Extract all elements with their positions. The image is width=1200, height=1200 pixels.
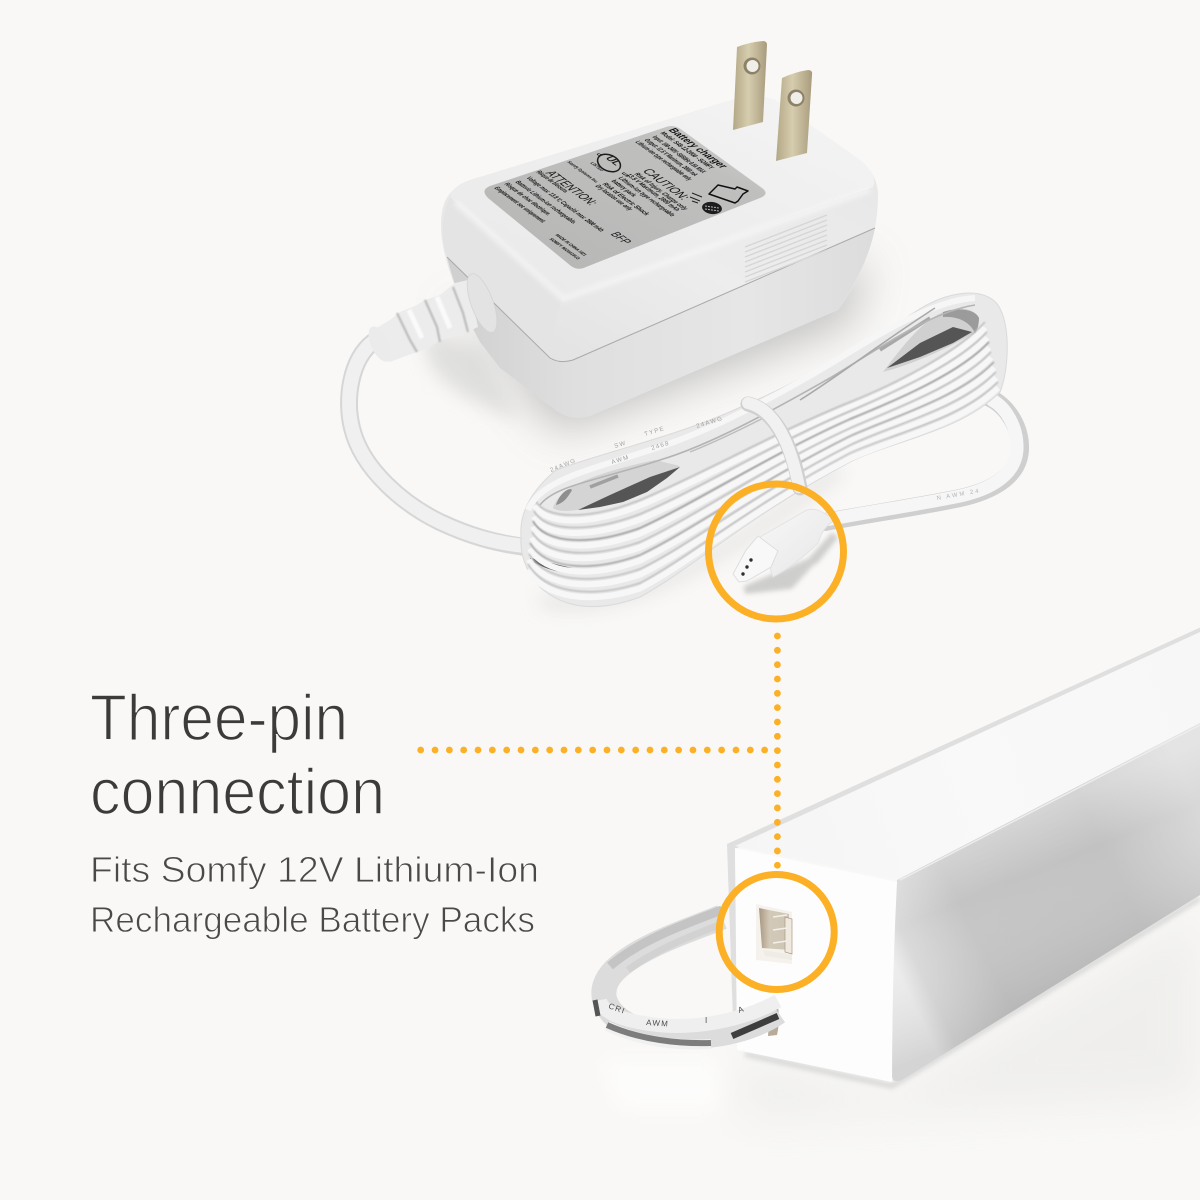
label text: ATTENTION: — [542, 169, 602, 207]
plug prongs — [733, 41, 812, 161]
icon: UL listed mark: UL — [602, 155, 623, 167]
label text: MADE IN CHINA 1821 — [553, 234, 588, 257]
body seam — [447, 228, 875, 362]
label text: BFP — [607, 230, 635, 246]
battery front face — [735, 848, 897, 1082]
wire printing: SW — [614, 441, 628, 450]
ribbed sleeve — [373, 280, 478, 362]
vent slats — [745, 215, 827, 282]
subheading: Rechargeable Battery Packs — [90, 899, 535, 940]
label text: CAUTION: — [639, 167, 694, 201]
wire printing: 2468 — [651, 441, 671, 452]
cable printing: A — [737, 1004, 746, 1015]
label text: Lithium-ion type rechargeable only — [633, 140, 693, 181]
plug pins — [741, 558, 753, 576]
loose flat wire to connector: N AWM 24 — [936, 488, 981, 502]
icon: UL listed mark — [595, 151, 623, 175]
battery pack — [727, 628, 1200, 1082]
body top face — [450, 96, 874, 297]
heading — [90, 681, 385, 828]
highlight ring: battery socket — [719, 874, 834, 990]
body front face — [550, 187, 876, 362]
icon: battery symbol — [701, 201, 723, 215]
cable printing: I — [705, 1016, 708, 1025]
subheading: Fits Somfy 12V Lithium-Ion — [90, 849, 539, 890]
cable printing: AWM — [646, 1018, 669, 1029]
sleeve tip — [364, 323, 396, 365]
plug body — [760, 509, 836, 577]
label text: Emplacement sec uniquement. — [492, 186, 547, 224]
label text: Batterie Lithium-ion rechargeable. — [513, 180, 578, 225]
sleeve rib highlights — [409, 297, 450, 338]
plug shadow — [745, 535, 835, 590]
battery top face — [735, 632, 1200, 880]
charger label — [484, 126, 766, 269]
cable tie — [748, 403, 800, 488]
battery side face — [892, 723, 1200, 1081]
label text: LISTED — [588, 162, 605, 172]
highlight ring: plug — [708, 484, 844, 619]
label text: us — [619, 172, 631, 178]
cable printing — [607, 1001, 746, 1029]
charger floor shadow — [426, 260, 870, 604]
body front highlight — [455, 190, 870, 299]
label plate — [484, 126, 766, 269]
three-pin plug — [733, 509, 836, 582]
label text: Model: S48-12-2000 - SOMFY — [658, 131, 715, 170]
cable printing: CRI — [607, 1001, 627, 1016]
body lower half — [447, 228, 875, 418]
sleeve collar — [461, 270, 503, 336]
coil right opening — [880, 309, 979, 372]
label text: Risque de choc électrique. — [502, 182, 552, 216]
label text — [492, 127, 730, 260]
battery socket — [756, 904, 792, 964]
body silhouette — [441, 96, 878, 418]
prong left — [733, 41, 767, 130]
heading: connection — [90, 755, 385, 828]
label text: SOMFY 9020019U3 — [547, 238, 581, 260]
label text: Dry location use only — [593, 184, 634, 211]
label text: Risque de blessure. — [534, 170, 570, 194]
power cord — [349, 342, 525, 547]
prong right — [776, 70, 812, 161]
battery top edge highlight — [900, 725, 1200, 880]
charger body — [441, 96, 878, 418]
slit between coil strands — [530, 558, 595, 574]
label text: Input: 100-240V~50/60Hz 0.5A MAX — [650, 135, 707, 174]
icon: DC polarity — [690, 193, 702, 203]
label text: c — [594, 153, 603, 157]
label text: Risk of Electric Shock — [600, 182, 651, 216]
dotted connector lines — [421, 636, 777, 868]
label text: Somfy Systems Inc. — [565, 161, 600, 184]
body left face — [443, 197, 563, 358]
battery rear rim — [727, 628, 1200, 1020]
battery cable exit — [768, 1006, 779, 1036]
wire coil — [521, 293, 1007, 607]
battery cable loop — [595, 910, 778, 1044]
icon: indoor use house — [709, 185, 748, 203]
loose flat wire to connector — [825, 398, 1020, 522]
heading: Three-pin — [90, 681, 348, 754]
cable dark stripes — [595, 1000, 778, 1044]
coil left opening — [553, 460, 680, 511]
label text: battery pack. — [609, 179, 638, 198]
subheading — [90, 849, 539, 940]
plug head — [733, 536, 778, 582]
horizontal dotted line — [421, 747, 768, 753]
wire printing: TYPE — [644, 426, 666, 438]
strain relief — [364, 270, 503, 365]
label text: Voltage max: 13.8 V; Capacité max: 2800 mAh — [524, 176, 605, 232]
vertical dotted line — [774, 636, 781, 868]
label text: Lithium-ion type rechargeable — [616, 176, 676, 217]
label text: 13.5 V Maximum, 2800 mAh — [624, 173, 681, 212]
label text: Risk of Injury. Charge only — [632, 172, 689, 211]
front strand highlights — [528, 328, 998, 597]
front strand edges — [528, 322, 998, 592]
wire printing — [550, 416, 724, 474]
back strands — [528, 298, 975, 510]
battery pack shadow — [600, 898, 1200, 1120]
wire printing: AWM — [611, 455, 630, 466]
wire printing: 24AWG — [550, 458, 578, 474]
coil silhouette — [521, 293, 1007, 607]
label text: Output: 12.6 V Maximum, 2000 mA — [642, 138, 699, 177]
wire printing: 24AWG — [696, 416, 724, 430]
label text: Battery charger — [665, 127, 730, 170]
sleeve rib shadows — [397, 287, 468, 352]
